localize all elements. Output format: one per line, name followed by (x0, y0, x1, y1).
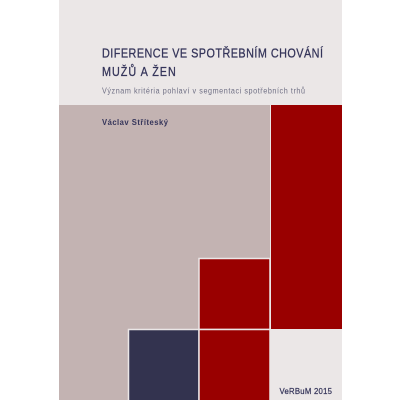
title (102, 44, 324, 79)
panel: middle red square (199, 258, 270, 330)
title: MUŽŮ A ŽEN (102, 63, 176, 79)
title: DIFERENCE VE SPOTŘEBNÍM CHOVÁNÍ (102, 44, 324, 61)
panel: cover background (59, 0, 342, 400)
panel: tall red block (271, 105, 342, 329)
publisher and year: VeRBuM 2015 (280, 387, 332, 396)
panel: navy square (128, 330, 199, 400)
author: Václav Stříteský (102, 118, 168, 127)
subtitle: Význam kritéria pohlaví v segmentaci spotřebních trhů (102, 86, 305, 96)
panel: taupe block (59, 105, 270, 400)
panel: lower red square (199, 330, 270, 400)
